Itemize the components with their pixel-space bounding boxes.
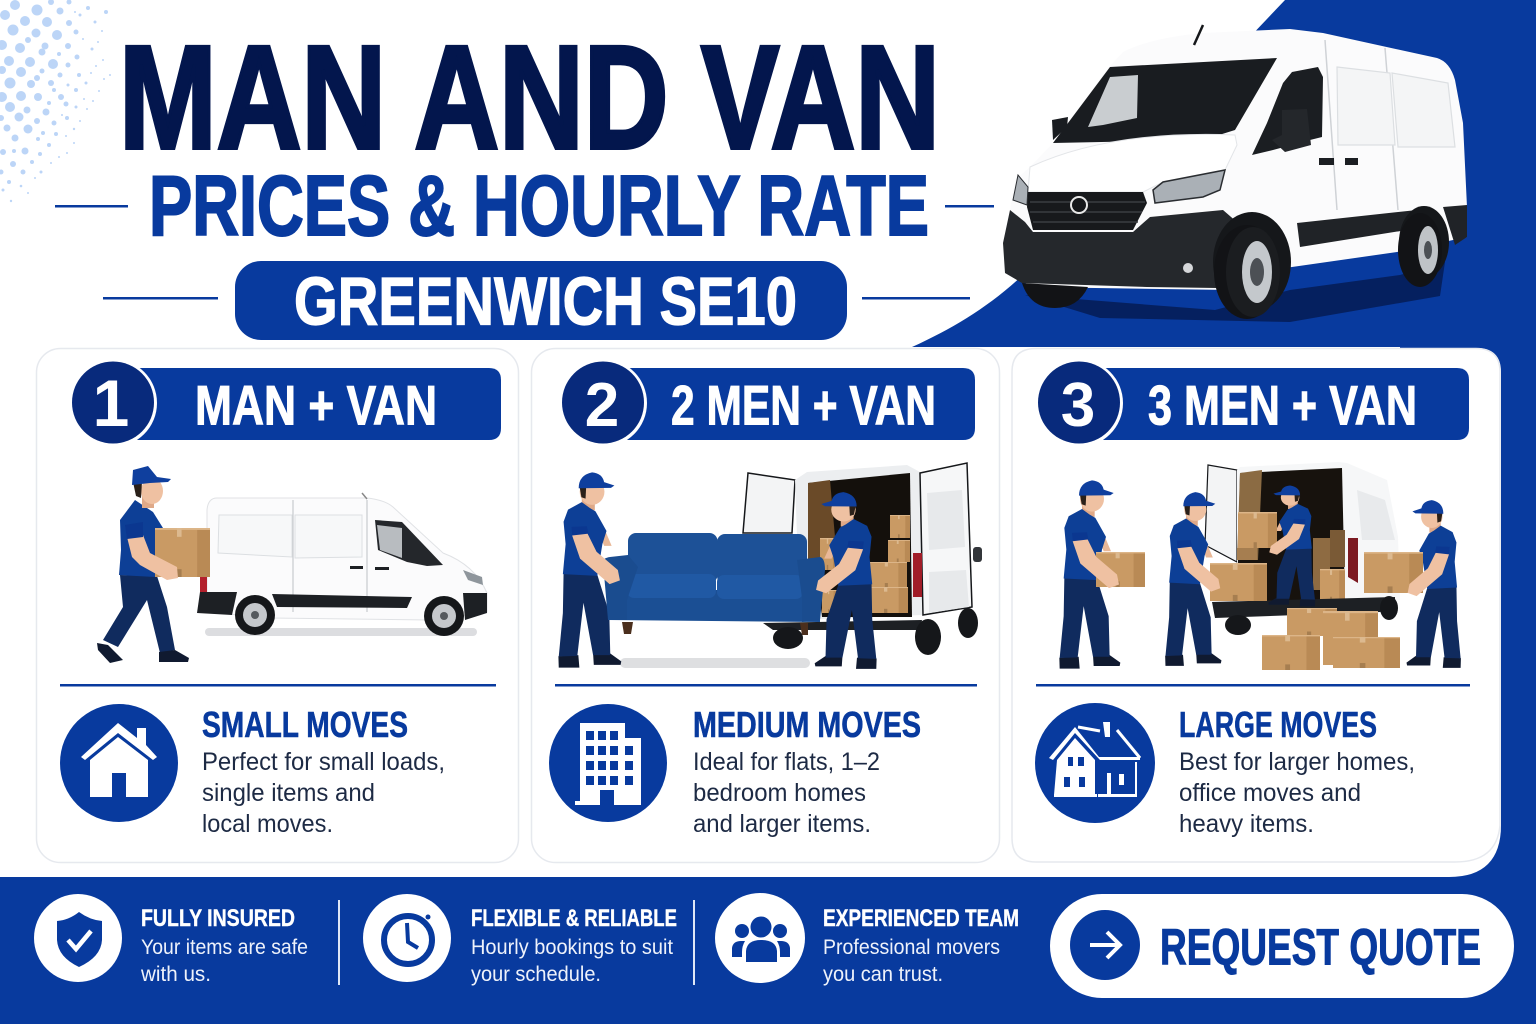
title: MAN AND VAN	[119, 16, 940, 180]
text: medium moves: Ideal for flats, 1–2	[693, 748, 880, 776]
icon: apartment building	[549, 704, 667, 822]
header: 3 men + van: 3	[1061, 371, 1095, 440]
text: large moves: LARGE MOVES	[1179, 704, 1377, 745]
feature: flexible and reliable: Hourly bookings to suit	[471, 936, 673, 959]
button: request quote	[1050, 894, 1514, 998]
hero van	[1003, 25, 1467, 322]
halftone decoration	[0, 0, 111, 202]
feature: fully insured	[34, 894, 308, 986]
panel 1	[36, 348, 518, 862]
footer band	[0, 877, 1536, 1024]
panel 3	[1012, 348, 1501, 877]
location badge: GREENWICH SE10	[294, 264, 797, 340]
header: man + van: MAN + VAN	[195, 374, 437, 436]
text: medium moves: and larger items.	[693, 810, 871, 838]
feature: experienced team	[715, 893, 1019, 986]
illustration: two men carrying sofa	[558, 463, 982, 669]
illustration: three men loading boxes	[1059, 462, 1461, 670]
text: small moves: single items and	[202, 779, 375, 807]
text: small moves: local moves.	[202, 810, 333, 838]
text: large moves: office moves and	[1179, 779, 1361, 807]
text: large moves	[1179, 704, 1415, 838]
feature: flexible and reliable	[363, 894, 677, 986]
blue corner background	[912, 0, 1536, 890]
illustration: one man with van	[97, 466, 487, 663]
header: 2 men + van: 2 MEN + VAN	[671, 374, 936, 436]
location badge	[103, 261, 970, 340]
text: small moves: Perfect for small loads,	[202, 748, 445, 776]
text: large moves: Best for larger homes,	[1179, 748, 1415, 776]
feature: experienced team: you can trust.	[823, 963, 943, 986]
header: 3 men + van	[1035, 359, 1469, 447]
feature: fully insured: Your items are safe	[141, 936, 308, 959]
header: 3 men + van: 3 MEN + VAN	[1148, 374, 1417, 436]
feature: fully insured: with us.	[140, 963, 211, 986]
feature: fully insured: FULLY INSURED	[141, 905, 295, 932]
feature: experienced team: Professional movers	[823, 936, 1000, 959]
icon: large house	[1035, 703, 1155, 823]
text: small moves: SMALL MOVES	[202, 704, 408, 745]
header: man + van: 1	[93, 366, 129, 440]
header: man + van	[69, 359, 501, 447]
feature: flexible and reliable: your schedule.	[471, 963, 601, 986]
text: medium moves: bedroom homes	[693, 779, 866, 807]
text: large moves: heavy items.	[1179, 810, 1314, 838]
header: 2 men + van: 2	[585, 371, 619, 440]
subtitle: PRICES & HOURLY RATE	[149, 159, 929, 254]
text: medium moves: MEDIUM MOVES	[693, 704, 921, 745]
feature: flexible and reliable: FLEXIBLE & RELIABLE	[471, 905, 677, 932]
text: medium moves	[693, 704, 921, 838]
feature: experienced team: EXPERIENCED TEAM	[823, 905, 1019, 932]
icon: house	[60, 704, 178, 822]
text: small moves	[202, 704, 445, 838]
header: 2 men + van	[559, 359, 975, 447]
panel 2	[532, 348, 1000, 862]
